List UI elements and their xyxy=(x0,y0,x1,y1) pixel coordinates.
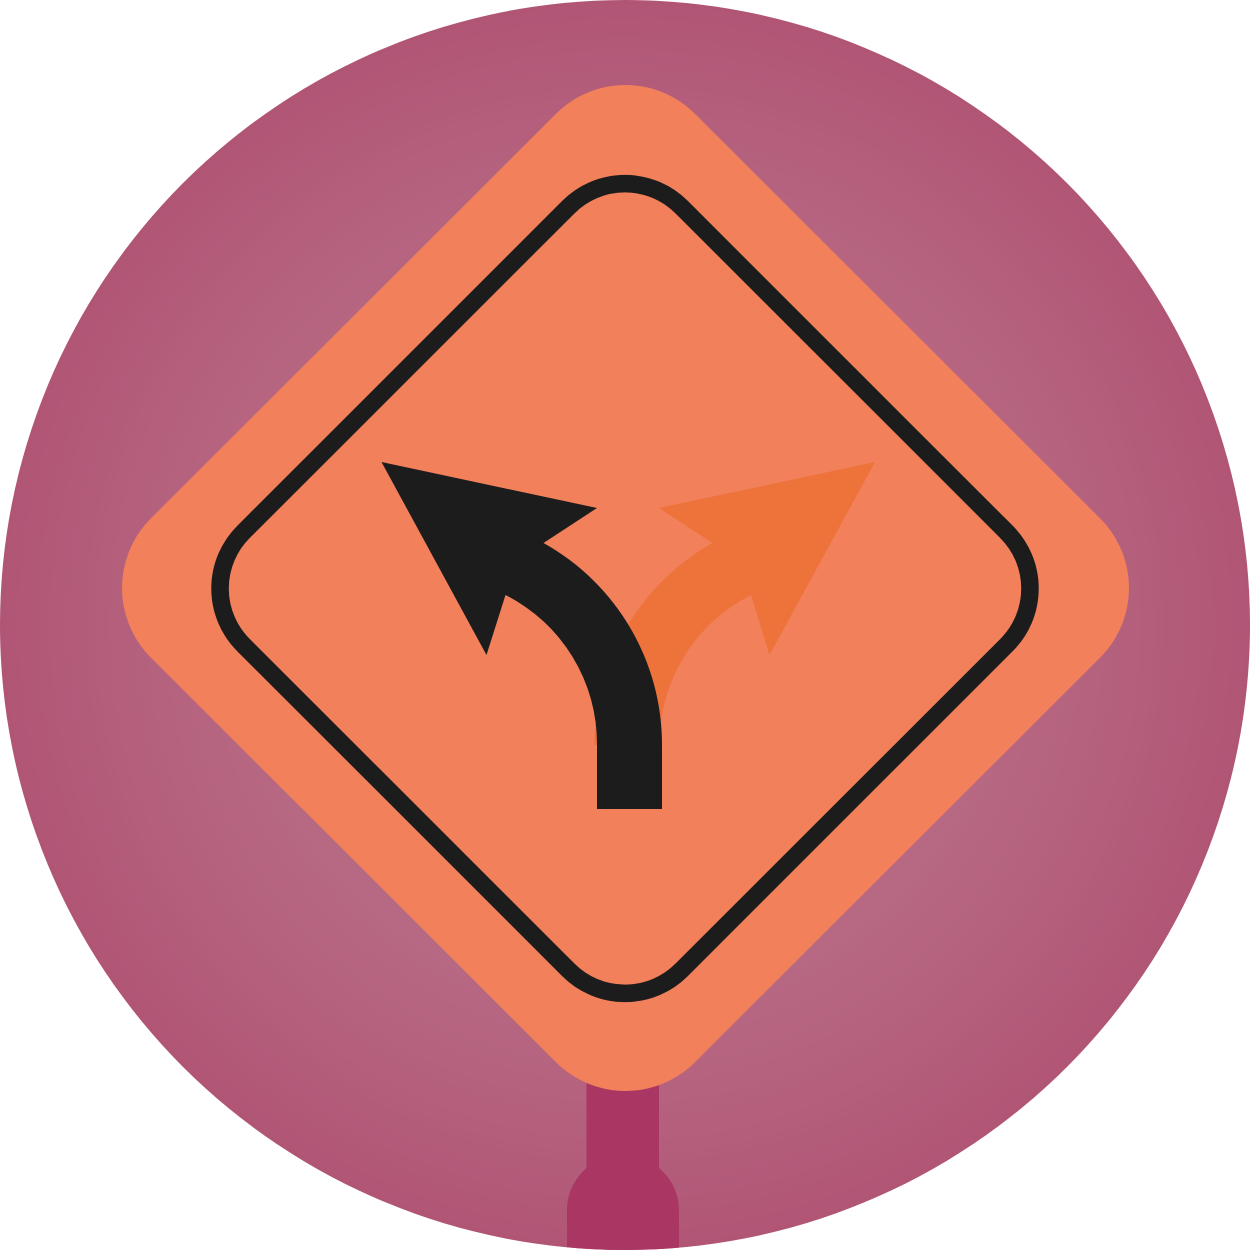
sign border: inner black rounded diamond xyxy=(220,184,1030,993)
arrow: black left branch xyxy=(382,462,662,809)
sign board: outer orange diamond xyxy=(122,85,1129,1091)
sign post xyxy=(567,1083,679,1250)
arrow: faded right branch xyxy=(594,462,875,745)
